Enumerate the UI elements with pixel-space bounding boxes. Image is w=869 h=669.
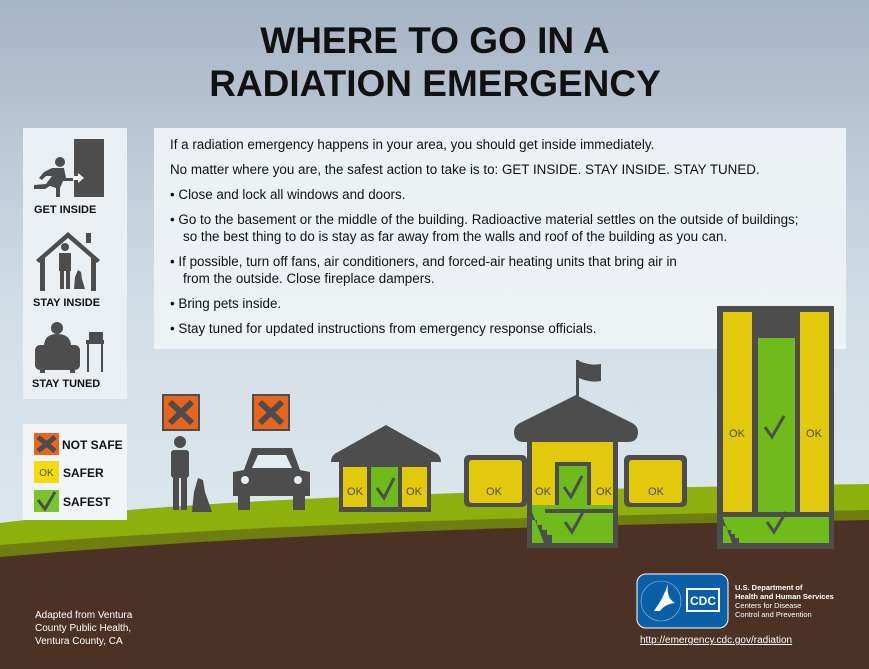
panel: instructions: • Stay tuned for updated instructions from emergency response officials. — [170, 321, 596, 336]
person outdoors: not safe — [163, 395, 212, 512]
side block left — [464, 455, 527, 507]
title: WHERE TO GO IN A — [260, 20, 610, 61]
tall building — [717, 306, 834, 549]
heading: stay tuned: STAY TUNED — [32, 378, 100, 390]
panel: instructions: • Close and lock all windows and doors. — [170, 187, 405, 202]
logo: CDC/HHS: CDC — [690, 594, 716, 608]
side block right — [624, 455, 687, 507]
heading: stay inside: STAY INSIDE — [33, 297, 100, 309]
credit text — [35, 610, 133, 647]
credit text: Adapted from Ventura — [35, 610, 133, 621]
heading: get inside: GET INSIDE — [34, 204, 96, 216]
title: RADIATION EMERGENCY — [209, 63, 661, 104]
icon: stay inside — [36, 232, 100, 291]
icon: safest — [34, 490, 59, 512]
small house: OK — [347, 486, 364, 498]
logo: CDC/HHS: Centers for Disease — [735, 601, 801, 610]
school building: OK — [596, 486, 613, 498]
panel: instructions: so the best thing to do is stay as far away from the walls and roof of the building as you can. — [183, 229, 727, 244]
tall building: OK — [729, 428, 746, 440]
panel: legend: SAFEST — [63, 495, 111, 509]
small house — [331, 425, 441, 512]
car: not safe — [233, 395, 310, 510]
panel: legend: NOT SAFE — [62, 438, 123, 452]
logo: CDC/HHS: Health and Human Services — [735, 592, 834, 601]
panel: instructions: from the outside. Close fireplace dampers. — [183, 271, 435, 286]
title — [209, 20, 661, 104]
icon: get inside — [34, 139, 104, 197]
panel: instructions: If a radiation emergency happens in your area, you should get inside immediately. — [170, 137, 654, 152]
icon: not safe — [34, 433, 59, 455]
icon: stay tuned — [35, 322, 104, 373]
panel: legend: SAFER — [63, 466, 104, 480]
small house: OK — [406, 486, 423, 498]
logo: CDC/HHS: Control and Prevention — [735, 610, 812, 619]
credit text: Ventura County, CA — [35, 636, 123, 647]
panel: instructions: • If possible, turn off fans, air conditioners, and forced-air heating units that bring air in — [170, 254, 677, 269]
panel: instructions: No matter where you are, the safest action to take is to: GET INSIDE. STAY INSIDE. STAY TUNED. — [170, 162, 760, 177]
ground: hill — [0, 484, 869, 669]
side block right: OK — [648, 486, 665, 498]
url: http://emergency.cdc.gov/radiation — [640, 635, 792, 646]
panel: instructions: • Bring pets inside. — [170, 296, 281, 311]
logo: CDC/HHS: U.S. Department of — [735, 583, 803, 592]
panel: instructions: • Go to the basement or the middle of the building. Radioactive material settles on the outside of buildings; — [170, 212, 798, 227]
icon: safer: OK — [39, 468, 54, 479]
panel: legend — [23, 424, 127, 520]
panel: actions — [23, 128, 127, 399]
school building — [514, 360, 638, 548]
school building: OK — [535, 486, 552, 498]
tall building: OK — [806, 428, 823, 440]
credit text: County Public Health, — [35, 623, 131, 634]
logo: CDC/HHS — [637, 574, 834, 628]
side block left: OK — [486, 486, 503, 498]
panel: instructions — [154, 128, 846, 349]
